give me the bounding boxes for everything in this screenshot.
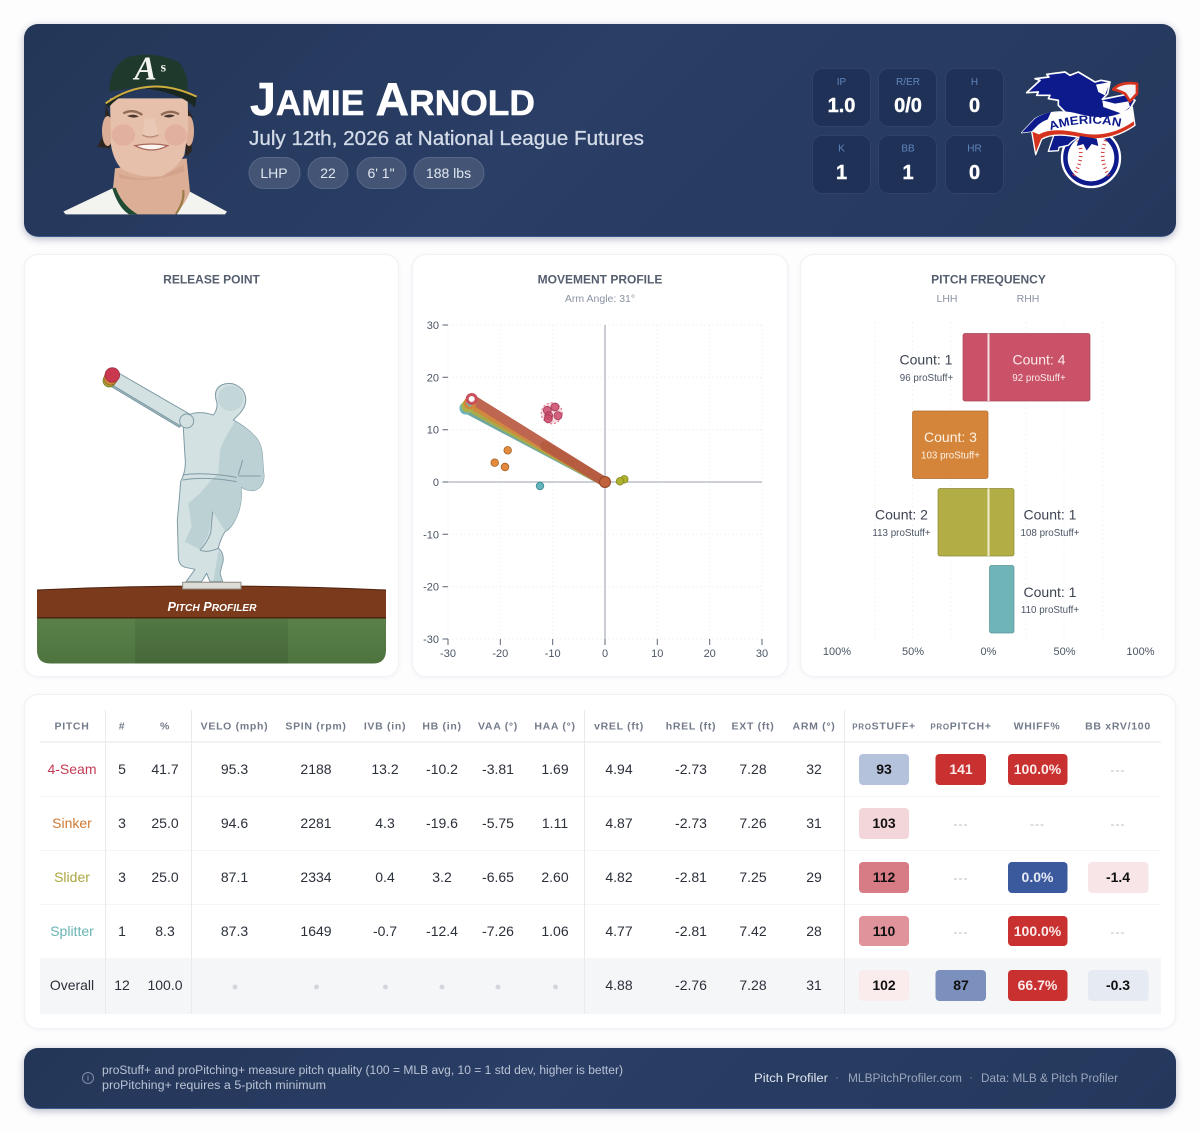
subheading: arm angle: Arm Angle: 31°	[565, 293, 635, 305]
chart: movement profile scatter: -10	[423, 529, 439, 541]
stat tiles: pitching line: R/ER	[896, 77, 920, 88]
brand: Pitch Profiler mound text: PITCH PROFILER	[168, 599, 257, 614]
row: Slider: -6.65	[482, 869, 514, 885]
row: Sinker: 31	[806, 815, 822, 831]
row: Sinker: -19.6	[426, 815, 458, 831]
row: Splitter: 4.77	[605, 923, 633, 939]
row: Overall	[50, 977, 1130, 993]
table header: BB xRV/100	[1085, 720, 1151, 732]
table header: WHIFF%	[1014, 720, 1060, 732]
stat tiles: pitching line: BB	[901, 144, 915, 154]
icon: player portrait: A	[133, 51, 157, 88]
row: Slider: 0.4	[375, 869, 395, 885]
row: 4-Seam: 13.2	[371, 761, 399, 777]
axis labels: batter sides: RHH	[1017, 293, 1039, 305]
chart: movement profile scatter: 20	[427, 372, 439, 384]
chart: movement profile scatter: -10	[545, 648, 561, 660]
row: 4-Seam: 4-Seam	[47, 761, 97, 777]
row: Overall: 100.0	[147, 977, 183, 993]
row: Sinker: 4.87	[605, 815, 633, 831]
row: Sinker: 1.11	[542, 815, 568, 831]
table header: ARM (°)	[793, 720, 835, 732]
stat tiles: pitching line: HR	[967, 144, 982, 154]
table header: vREL (ft)	[594, 720, 644, 732]
row: Splitter: 1649	[300, 923, 332, 939]
row: Overall: 12	[114, 977, 130, 993]
bar: Splitter	[990, 566, 1079, 633]
stat tiles: pitching line	[812, 68, 1004, 194]
row: Slider	[54, 869, 1130, 885]
row: 4-Seam: ---	[1110, 763, 1126, 777]
table header	[54, 720, 1151, 732]
icon: player portrait: s	[161, 61, 167, 76]
arm angle lines	[466, 399, 605, 482]
row: 4-Seam: 1.69	[541, 761, 569, 777]
row: Splitter: 7.42	[739, 923, 767, 939]
axis: percent: 50%	[1053, 646, 1076, 658]
row: Splitter: -2.81	[675, 923, 707, 939]
row: Splitter: 1	[118, 923, 126, 939]
row: 4-Seam: -2.73	[675, 761, 707, 777]
chart: movement profile scatter: 10	[427, 425, 439, 437]
bar: Slider: Count: 2	[875, 506, 928, 522]
rubber	[183, 582, 241, 589]
row: Slider: 3	[118, 869, 126, 885]
bar: Slider	[872, 488, 1080, 556]
axis labels: batter sides	[936, 293, 1039, 305]
heading: release point: RELEASE POINT	[163, 272, 261, 286]
chart: movement profile scatter: -30	[423, 634, 439, 646]
table header: VELO (mph)	[201, 720, 268, 732]
row: Sinker: 7.26	[739, 815, 767, 831]
row: Slider: 3.2	[432, 869, 452, 885]
chart: movement profile scatter: -30	[440, 648, 456, 660]
stat tiles: pitching line: 1	[836, 162, 847, 184]
table header: VAA (°)	[478, 720, 518, 732]
rating pills	[859, 754, 1148, 1001]
credits: Pitch Profiler	[754, 1073, 828, 1085]
bar: 4-Seam: Count: 1	[900, 352, 953, 368]
chart: movement profile scatter: 30	[756, 648, 768, 660]
table header: PITCH	[54, 720, 90, 732]
table header: HB (in)	[422, 720, 462, 732]
row: Overall: 102	[872, 977, 896, 993]
table: pitch metrics	[40, 710, 1161, 1014]
credits: MLBPitchProfiler.com	[848, 1073, 962, 1085]
credits: ·	[969, 1072, 973, 1084]
chart: movement profile scatter: -20	[423, 582, 439, 594]
row: 4-Seam: 93	[876, 761, 892, 777]
row: Overall: -0.3	[1106, 977, 1130, 993]
stat tiles: pitching line: 1	[902, 162, 914, 184]
note: metric explanation: proStuff+ and proPitching+ measure pitch quality (100 = MLB avg, 10 = 1 std dev, higher is better)	[102, 1065, 623, 1077]
credits: ·	[835, 1072, 839, 1084]
row: 4-Seam: -10.2	[426, 761, 458, 777]
row: 4-Seam: 7.28	[739, 761, 767, 777]
row: 4-Seam: 32	[806, 761, 822, 777]
row: Slider: 29	[806, 869, 822, 885]
chart: movement profile scatter: 30	[427, 320, 439, 332]
bar: Slider: 108 proStuff+	[1021, 528, 1080, 539]
pitch dots	[491, 403, 628, 490]
row: Slider: ---	[954, 871, 968, 885]
bar: 4-Seam	[900, 334, 1090, 401]
row: Splitter: 100.0%	[1014, 923, 1062, 939]
note: metric explanation: proPitching+ requires a 5-pitch minimum	[102, 1080, 326, 1092]
stat tiles: pitching line: 0	[969, 162, 980, 184]
bar: Splitter: 110 proStuff+	[1021, 605, 1079, 616]
stat tiles: pitching line: 0/0	[894, 95, 922, 117]
row: Slider: 4.82	[605, 869, 633, 885]
row: Sinker	[52, 815, 1126, 831]
bar: 4-Seam: 92 proStuff+	[1012, 373, 1066, 384]
row: Sinker: 103	[872, 815, 896, 831]
row: Slider: 2334	[300, 869, 332, 885]
heading: movement profile: MOVEMENT PROFILE	[538, 272, 662, 286]
tags: player attributes: 6' 1"	[367, 165, 395, 181]
row: Slider: 2.60	[541, 869, 569, 885]
row: Sinker: 4.3	[375, 815, 395, 831]
row: Slider: -1.4	[1106, 869, 1130, 885]
row: Splitter: 87.3	[221, 923, 248, 939]
row: Sinker: -2.73	[675, 815, 707, 831]
axis: percent: 50%	[902, 646, 924, 658]
row: Sinker: 25.0	[151, 815, 179, 831]
stat tiles: pitching line: IP	[837, 77, 847, 88]
row: Splitter: 1.06	[541, 923, 569, 939]
row: Slider: 112	[873, 869, 896, 885]
row: Sinker: Sinker	[52, 815, 92, 831]
bar: Sinker: 103 proStuff+	[921, 450, 980, 462]
row: Sinker: ---	[954, 817, 968, 831]
table header: hREL (ft)	[666, 720, 716, 732]
row: Sinker: 94.6	[221, 815, 248, 831]
panel: pitch metrics table	[24, 694, 1176, 1029]
tags: player attributes: 22	[320, 165, 336, 181]
row: Slider: -2.81	[675, 869, 707, 885]
axis: percent: 100%	[823, 646, 851, 658]
row: Overall: 4.88	[605, 977, 633, 993]
chart: pitch frequency bars	[823, 322, 1155, 658]
axis: percent: 0%	[981, 646, 997, 658]
mound and grass	[37, 586, 386, 664]
bar: Slider: 113 proStuff+	[872, 528, 931, 539]
row: Sinker: -5.75	[482, 815, 514, 831]
panel: movement profile	[412, 254, 788, 677]
row: Overall: Overall	[50, 977, 94, 993]
bar: Sinker	[912, 411, 988, 478]
row: 4-Seam: 5	[118, 761, 126, 777]
chart: movement profile scatter	[423, 320, 768, 660]
release point markers	[103, 368, 120, 387]
title: player name: JAMIE ARNOLD	[250, 73, 535, 125]
table header: IVB (in)	[364, 720, 406, 732]
row: Slider: 87.1	[221, 869, 248, 885]
row: Splitter: -0.7	[373, 923, 397, 939]
icon: American League logo	[1021, 71, 1138, 188]
row: Overall: 31	[806, 977, 822, 993]
row: Overall: 87	[953, 977, 969, 993]
icon: American League logo: AMERICAN	[1050, 116, 1122, 130]
table header: SPIN (rpm)	[285, 720, 347, 732]
axis: percent: 100%	[1126, 646, 1155, 658]
tags: player attributes: LHP	[260, 165, 288, 181]
note: metric explanation	[102, 1065, 623, 1092]
row: Sinker: ---	[1110, 817, 1126, 831]
row: 4-Seam: -3.81	[482, 761, 514, 777]
bar: Splitter: Count: 1	[1024, 584, 1077, 600]
bar: Sinker: Count: 3	[924, 429, 977, 445]
axis: percent	[823, 646, 1155, 658]
row: Slider: 25.0	[151, 869, 179, 885]
credits	[754, 1072, 1118, 1085]
chart: movement profile scatter: -20	[492, 648, 508, 660]
bar: 4-Seam: Count: 4	[1013, 352, 1066, 368]
panel: header banner	[24, 24, 1176, 237]
table header: %	[160, 720, 170, 732]
table header: #	[119, 720, 125, 732]
row: 4-Seam	[47, 761, 1126, 777]
row: Splitter: ---	[954, 925, 968, 939]
stat tiles: pitching line: 0	[969, 95, 980, 117]
row: Slider: Slider	[54, 869, 90, 885]
row: Splitter: ---	[1110, 925, 1126, 939]
row: 4-Seam: 141	[949, 761, 973, 777]
chart: movement profile scatter: 0	[602, 648, 608, 660]
row: Sinker: 3	[118, 815, 126, 831]
row: Splitter: Splitter	[50, 923, 94, 939]
heading: pitch frequency: PITCH FREQUENCY	[931, 272, 1046, 286]
axes	[442, 325, 762, 645]
row: Splitter: 110	[873, 923, 896, 939]
tags: player attributes: 188 lbs	[426, 165, 471, 181]
credits: Data: MLB & Pitch Profiler	[981, 1073, 1118, 1085]
row: 4-Seam: 2188	[300, 761, 332, 777]
table header: HAA (°)	[534, 720, 576, 732]
bar: 4-Seam: 96 proStuff+	[900, 373, 954, 384]
chart: release point illustration	[37, 368, 386, 664]
subtitle: game date: July 12th, 2026 at National League Futures	[249, 128, 644, 150]
tags: player attributes	[249, 158, 484, 188]
chart: movement profile scatter: 0	[433, 477, 439, 489]
row: Splitter: -7.26	[482, 923, 514, 939]
row: Overall: 66.7%	[1018, 977, 1058, 993]
row: Sinker: 2281	[300, 815, 332, 831]
row: Splitter: -12.4	[426, 923, 458, 939]
icon: pitcher figure	[103, 368, 264, 589]
row: Slider: 7.25	[739, 869, 767, 885]
row: Overall: 7.28	[739, 977, 767, 993]
icon: player portrait	[63, 51, 227, 214]
table header: EXT (ft)	[732, 720, 774, 732]
row: 4-Seam: 41.7	[151, 761, 179, 777]
row: Splitter: 28	[806, 923, 822, 939]
panel: release point	[24, 254, 399, 677]
panel: pitch frequency	[800, 254, 1176, 677]
bar: Slider: Count: 1	[1024, 506, 1077, 522]
chart: movement profile scatter: 10	[651, 648, 663, 660]
stat tiles: pitching line: K	[838, 144, 845, 154]
row: Sinker: ---	[1030, 817, 1045, 831]
stat tiles: pitching line: H	[971, 77, 978, 88]
row: Overall: -2.76	[675, 977, 707, 993]
panel: footer banner	[24, 1048, 1176, 1109]
icon: info	[82, 1072, 94, 1084]
row: Splitter	[50, 923, 1126, 939]
table header: PROPITCH+	[930, 720, 992, 732]
row: Splitter: 8.3	[155, 923, 175, 939]
axis labels: batter sides: LHH	[936, 293, 958, 305]
stat tiles: pitching line: 1.0	[828, 95, 855, 117]
row: 4-Seam: 100.0%	[1014, 761, 1062, 777]
chart: movement profile scatter: 20	[704, 648, 716, 660]
row: 4-Seam: 95.3	[221, 761, 248, 777]
row: 4-Seam: 4.94	[605, 761, 633, 777]
table header: PROSTUFF+	[852, 720, 916, 732]
row: Slider: 0.0%	[1022, 869, 1054, 885]
